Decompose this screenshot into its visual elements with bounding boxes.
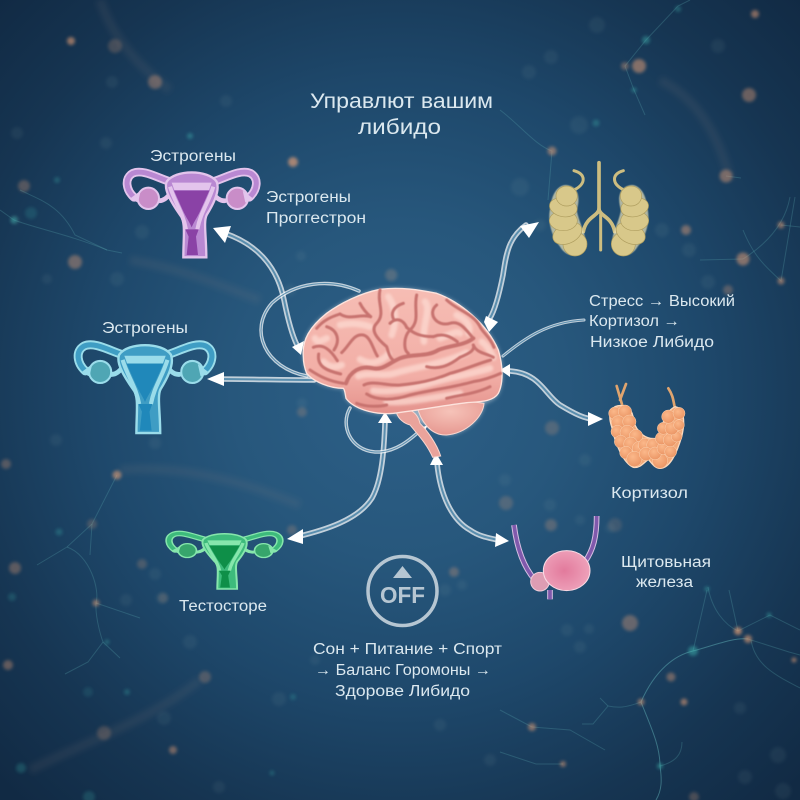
brain glow <box>303 288 502 435</box>
text: sleep, nutrition, sport: Здорове Либидо <box>335 683 470 700</box>
uterus: blue <box>78 345 212 433</box>
uterus: green <box>169 533 280 589</box>
title: Управлют вашим <box>310 90 493 113</box>
brain stem <box>397 410 441 457</box>
brain <box>303 288 502 457</box>
arrow: brain to bladder <box>430 453 509 547</box>
arrow: brain to blue uterus <box>207 372 314 386</box>
text: stress to low libido: Стресс → Высокий <box>589 293 735 310</box>
icon: adrenal glands <box>548 163 650 256</box>
label: thyroid gland: Щитовьная <box>621 554 711 571</box>
label: cortisol: Кортизол <box>611 485 688 502</box>
label: thyroid gland <box>621 554 711 591</box>
arrow: upper brain loop <box>261 284 359 376</box>
cerebrum <box>303 288 502 414</box>
arrow: brain to purple uterus <box>213 226 304 355</box>
label: estrogens and progesterone <box>266 189 366 227</box>
text: sleep, nutrition, sport: Сон + Питание + Спорт <box>313 641 502 658</box>
label: estrogens blue: Эстрогены <box>102 320 188 337</box>
icon: off button: OFF <box>380 582 425 608</box>
connecting arrows <box>207 222 603 547</box>
uterus: purple <box>127 172 256 257</box>
arrow: lower brain loop <box>346 408 428 452</box>
text: sleep, nutrition, sport: → Баланс Горомоны → <box>315 662 491 679</box>
text: stress to low libido: Кортизол → <box>589 313 680 330</box>
icon: bladder <box>514 516 597 599</box>
text: sleep, nutrition, sport <box>313 641 502 700</box>
label: estrogens and progesterone: Эстрогены <box>266 189 351 206</box>
label: testosterone: Тестосторе <box>179 598 267 615</box>
cerebellum <box>417 402 484 435</box>
title: либидо <box>358 116 441 139</box>
arrow: brain to green uterus <box>287 412 392 544</box>
arrow: pointer to stress text <box>503 320 584 356</box>
text: stress to low libido: Низкое Либидо <box>590 334 714 351</box>
icon: thyroid <box>609 384 685 468</box>
label: thyroid gland: железа <box>636 574 693 591</box>
label: estrogens purple: Эстрогены <box>150 148 236 165</box>
arrow: brain to adrenal glands <box>484 222 539 332</box>
title <box>310 90 493 139</box>
label: estrogens and progesterone: Проггестрон <box>266 210 366 227</box>
text: stress to low libido <box>589 293 735 351</box>
icon: off button <box>368 556 437 626</box>
arrow: brain to thyroid <box>500 364 603 426</box>
thyroid body backing <box>610 406 684 468</box>
